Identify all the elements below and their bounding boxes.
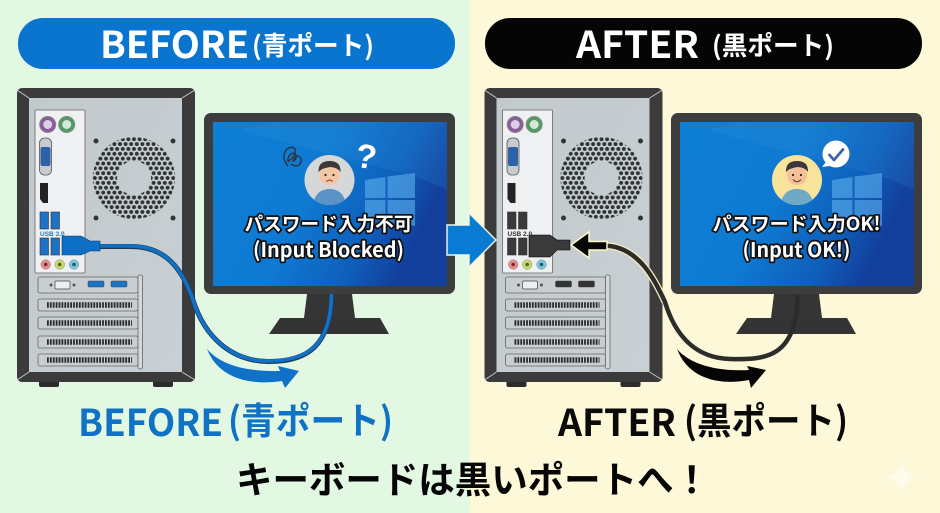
- icon: black USB plug: [529, 235, 570, 257]
- icon: USB 3.0 ports: USB 3.0: [40, 231, 65, 238]
- screen text: before: (Input Blocked): [253, 233, 404, 263]
- icon: HDMI port: [508, 183, 516, 203]
- screen text: after: [712, 210, 880, 263]
- icon: PS/2 ports: [507, 116, 542, 132]
- panel: after PC tower: [484, 88, 662, 387]
- screen text: before: パスワード入力不可: [244, 210, 412, 236]
- icon: confused user avatar: [304, 155, 354, 205]
- label: after: (黒ポート): [684, 391, 848, 445]
- icon: fan grille: [560, 137, 643, 220]
- label: before: [78, 391, 393, 447]
- panel: before monitor: [204, 113, 455, 334]
- header: after: [485, 15, 922, 69]
- icon: question mark: ?: [353, 137, 379, 177]
- panel: before PC tower: [17, 88, 195, 387]
- icon: slot covers: [38, 275, 142, 369]
- background: after side: [470, 0, 940, 513]
- label: after: AFTER: [557, 393, 676, 447]
- arrow: before cable direction: [207, 349, 299, 388]
- icon: blue USB plug: [62, 236, 100, 255]
- label: before: (青ポート): [228, 391, 393, 445]
- header: before: (青ポート): [252, 26, 374, 63]
- screen text: after: (Input OK!): [742, 233, 850, 263]
- icon: audio jacks: [508, 260, 546, 269]
- icon: check speech bubble: [822, 140, 850, 168]
- header: before: BEFORE: [100, 15, 249, 69]
- icon: audio jacks: [41, 260, 79, 269]
- header: after: (黒ポート): [712, 26, 834, 63]
- panel: after monitor: [671, 113, 922, 334]
- background: before side: [0, 0, 470, 513]
- icon: PS/2 ports: [40, 116, 75, 132]
- screen text: after: パスワード入力OK!: [712, 210, 880, 236]
- label: after: [557, 391, 848, 447]
- cable: after black USB: [529, 235, 798, 359]
- icon: VGA port: [507, 138, 519, 175]
- arrow: plug into black port: [571, 232, 607, 258]
- icon: sparkle: [886, 460, 917, 494]
- header: after: AFTER: [575, 15, 699, 69]
- icon: tangled scribble: [284, 147, 301, 166]
- icon: expansion card with ports: [506, 277, 606, 293]
- conclusion message: キーボードは黒いポートへ！: [236, 450, 710, 504]
- icon: windows logo: [832, 173, 882, 226]
- cable: before blue USB: [62, 236, 332, 362]
- icon: USB 3.0 ports: [40, 212, 65, 255]
- icon: USB 2.0 ports: USB 2.0: [508, 231, 532, 238]
- icon: HDMI port: [40, 183, 48, 203]
- label: before: BEFORE: [78, 393, 223, 447]
- icon: VGA port: [40, 138, 52, 175]
- arrow: before to after: [447, 213, 496, 267]
- header: before: [18, 15, 455, 69]
- icon: fan grille: [93, 137, 176, 220]
- screen text: before: [244, 210, 412, 263]
- arrow: after cable direction: [677, 349, 766, 388]
- icon: USB 2.0 ports: [508, 212, 532, 255]
- icon: slot covers: [506, 275, 610, 369]
- icon: happy user avatar: [772, 155, 822, 205]
- icon: expansion card with ports: [38, 277, 138, 293]
- icon: windows logo: [365, 173, 415, 226]
